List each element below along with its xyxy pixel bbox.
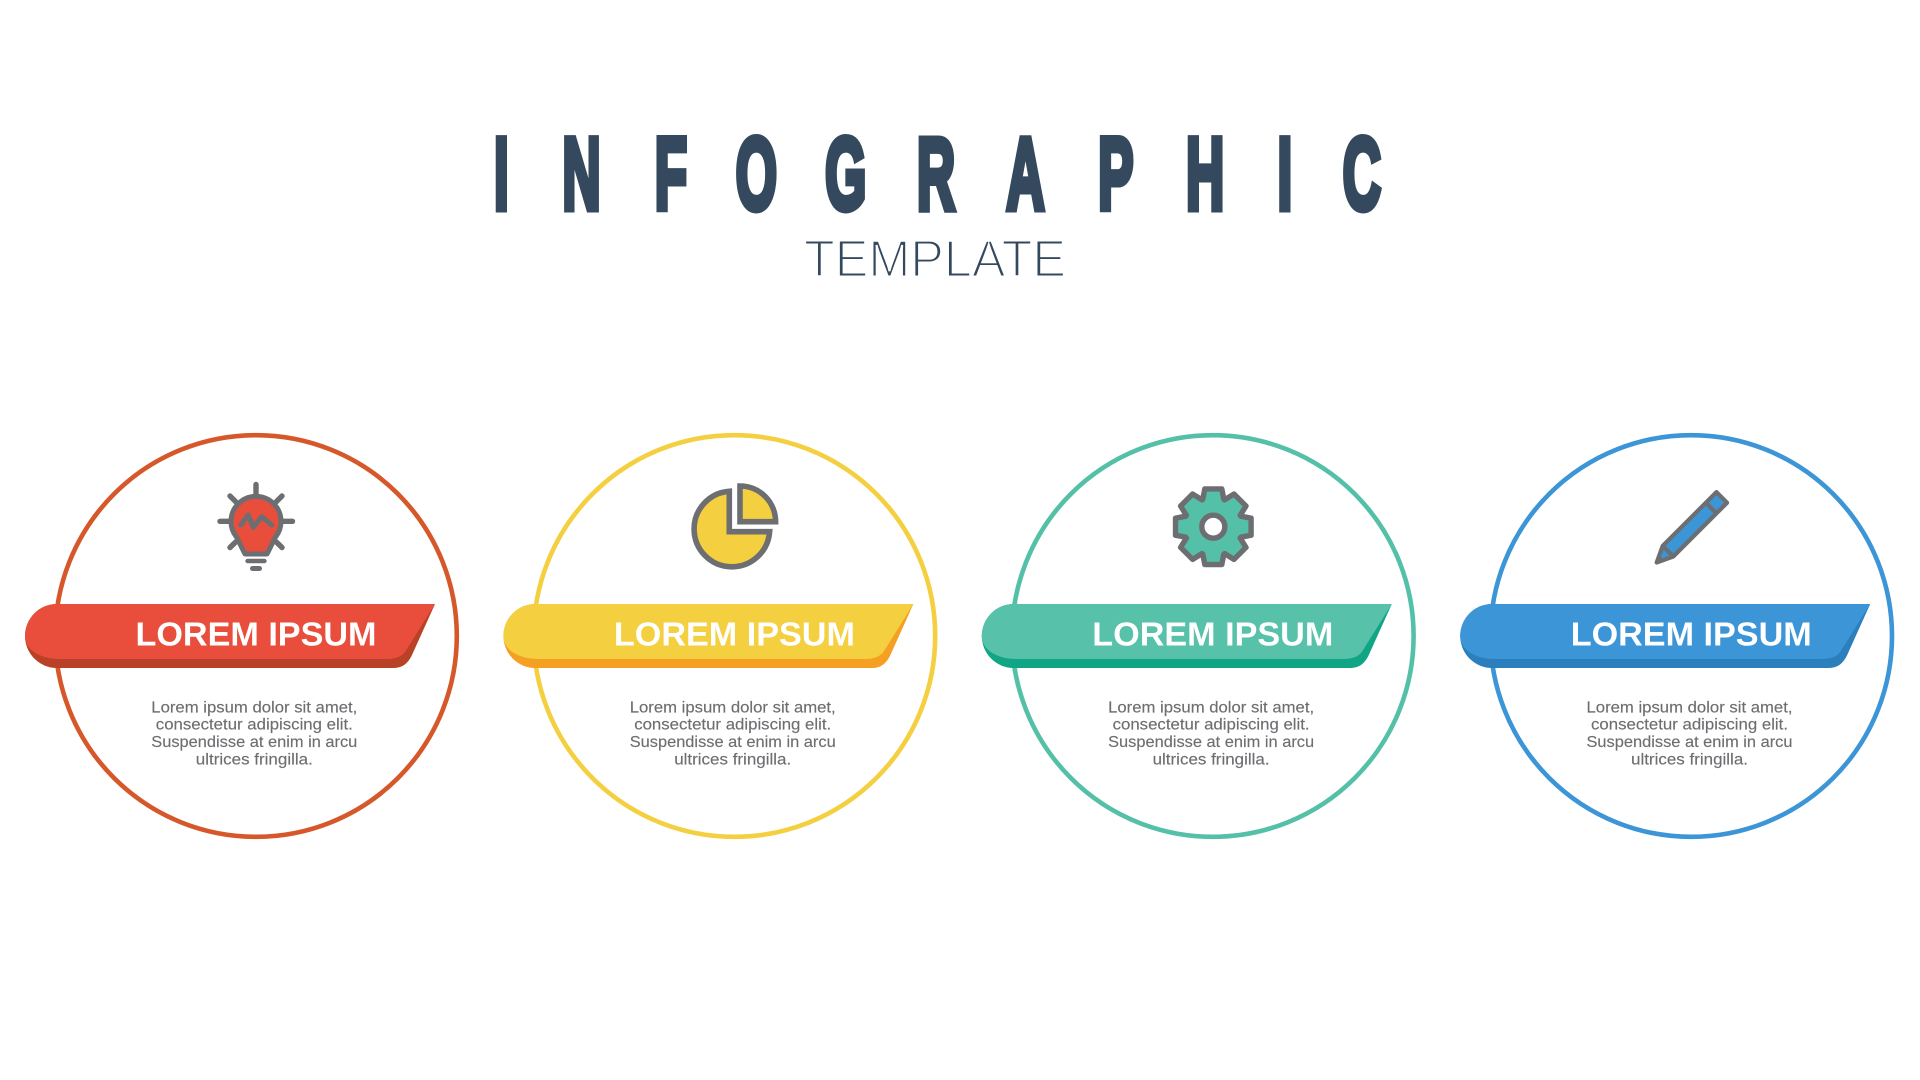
body text: Lorem ipsum dolor sit amet,	[630, 699, 836, 716]
body text	[630, 699, 836, 768]
body text: Lorem ipsum dolor sit amet,	[1108, 699, 1314, 716]
banner heading: LOREM IPSUM	[1571, 616, 1812, 653]
body text: consectetur adipiscing elit.	[634, 717, 831, 734]
body text: ultrices fringilla.	[1153, 751, 1270, 768]
subtitle: TEMPLATE	[804, 231, 1066, 289]
body text: Suspendisse at enim in arcu	[151, 734, 357, 751]
red circle outline	[55, 435, 457, 837]
body text	[1108, 699, 1314, 768]
yellow banner	[503, 604, 913, 668]
icon: gear	[1176, 489, 1251, 564]
body text: consectetur adipiscing elit.	[1113, 717, 1310, 734]
body text: consectetur adipiscing elit.	[156, 717, 353, 734]
body text: Suspendisse at enim in arcu	[630, 734, 836, 751]
body text	[1586, 699, 1792, 768]
banner heading: LOREM IPSUM	[614, 616, 855, 653]
title: INFOGRAPHIC	[494, 117, 1381, 231]
blue banner	[1460, 604, 1870, 668]
body text: ultrices fringilla.	[674, 751, 791, 768]
red banner	[25, 604, 435, 668]
teal banner	[982, 604, 1392, 668]
body text: Suspendisse at enim in arcu	[1108, 734, 1314, 751]
banner heading: LOREM IPSUM	[136, 616, 376, 653]
icon: light bulb	[220, 484, 292, 568]
body text: Suspendisse at enim in arcu	[1586, 734, 1792, 751]
teal circle outline	[1012, 435, 1414, 837]
body text: ultrices fringilla.	[1631, 751, 1748, 768]
body text: ultrices fringilla.	[196, 751, 313, 768]
body text	[151, 699, 357, 768]
panel: yellow pie chart	[503, 435, 935, 837]
body text: Lorem ipsum dolor sit amet,	[151, 699, 357, 716]
yellow circle outline	[534, 435, 935, 837]
panel: red bulb	[25, 435, 457, 837]
body text: Lorem ipsum dolor sit amet,	[1586, 699, 1792, 716]
icon: pie chart	[694, 486, 776, 567]
blue circle outline	[1490, 435, 1892, 837]
body text: consectetur adipiscing elit.	[1591, 717, 1788, 734]
icon: pencil	[1651, 492, 1727, 568]
banner heading: LOREM IPSUM	[1092, 616, 1333, 653]
panel: blue pencil	[1460, 435, 1892, 837]
panel: teal gear	[982, 435, 1414, 837]
